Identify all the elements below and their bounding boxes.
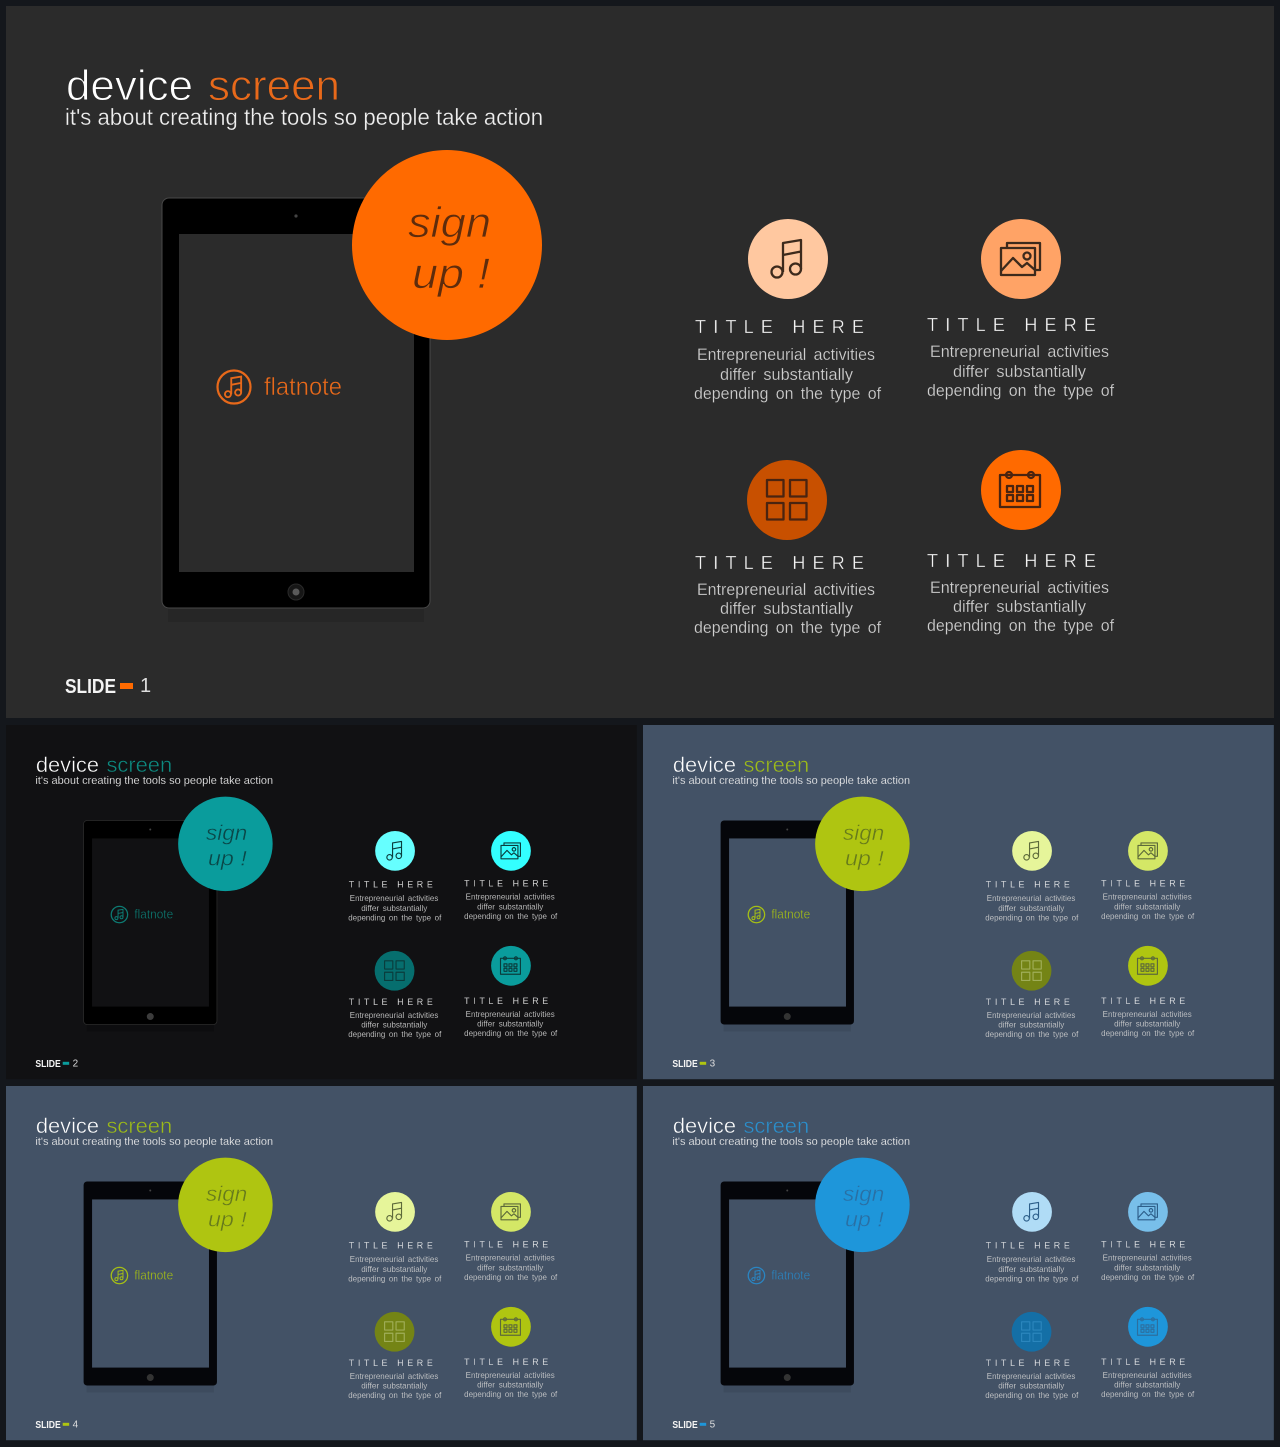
feature: pictures: TITLE HERE <box>1101 879 1185 889</box>
tablet device <box>721 821 854 1031</box>
flatnote logo <box>218 370 342 404</box>
sign up badge <box>178 797 273 891</box>
tablet device <box>84 821 217 1031</box>
title: screen <box>106 1114 172 1138</box>
slide number <box>672 1419 716 1431</box>
feature: music: Entrepreneurial activities <box>350 894 438 903</box>
feature: calendar: TITLE HERE <box>1101 1357 1185 1367</box>
title: device <box>673 753 736 777</box>
title <box>36 1114 172 1138</box>
feature: grid: Entrepreneurial activities <box>987 1011 1075 1020</box>
feature: music <box>694 219 881 403</box>
sign up badge: up ! <box>845 846 884 870</box>
feature: pictures: differ substantially <box>1114 1264 1181 1273</box>
sign up badge: sign <box>408 199 491 247</box>
title: screen <box>208 62 340 110</box>
slide number: SLIDE <box>672 1420 698 1431</box>
feature: calendar: depending on the type of <box>464 1390 558 1399</box>
feature: music: depending on the type of <box>348 914 442 923</box>
title: device <box>36 753 99 777</box>
sign up badge: up ! <box>208 846 247 870</box>
feature: pictures: TITLE HERE <box>927 315 1096 335</box>
subtitle: it's about creating the tools so people take action <box>65 104 543 130</box>
title: screen <box>106 753 172 777</box>
slide number: SLIDE <box>65 676 116 698</box>
feature: calendar: TITLE HERE <box>464 1357 548 1367</box>
slide number <box>35 1058 79 1070</box>
feature: music <box>985 831 1079 923</box>
feature: grid: differ substantially <box>998 1381 1065 1390</box>
subtitle: it's about creating the tools so people take action <box>672 1136 910 1148</box>
feature: calendar: depending on the type of <box>1101 1390 1195 1399</box>
sign up badge: up ! <box>845 1207 884 1231</box>
flatnote logo <box>111 1267 173 1284</box>
feature: grid: TITLE HERE <box>986 997 1070 1007</box>
flatnote logo: flatnote <box>771 1269 810 1283</box>
feature: calendar: Entrepreneurial activities <box>466 1010 555 1019</box>
slide number: 1 <box>140 675 151 697</box>
feature: music: differ substantially <box>361 904 428 913</box>
feature: music: Entrepreneurial activities <box>987 1255 1075 1264</box>
feature: pictures: depending on the type of <box>1101 1273 1195 1282</box>
flatnote logo <box>748 1267 810 1284</box>
feature: grid <box>985 1312 1079 1400</box>
feature: calendar <box>927 450 1114 635</box>
feature: music <box>348 831 442 923</box>
feature: calendar: TITLE HERE <box>1101 996 1185 1006</box>
subtitle: it's about creating the tools so people take action <box>672 775 910 787</box>
feature: pictures: differ substantially <box>477 903 544 912</box>
slide number <box>65 675 151 698</box>
flatnote logo: flatnote <box>134 1269 173 1283</box>
feature: pictures <box>1101 1192 1195 1282</box>
feature: calendar: differ substantially <box>1114 1380 1181 1389</box>
feature: grid: depending on the type of <box>694 619 881 637</box>
sign up badge <box>815 797 910 891</box>
feature: calendar <box>1101 1307 1195 1399</box>
feature: music: differ substantially <box>998 904 1065 913</box>
tablet device <box>162 198 430 622</box>
slide number: 2 <box>73 1058 79 1069</box>
title: screen <box>743 1114 809 1138</box>
slide number: 4 <box>73 1419 79 1430</box>
feature: pictures: depending on the type of <box>464 1273 558 1282</box>
feature: grid: differ substantially <box>998 1020 1065 1029</box>
feature: pictures: depending on the type of <box>927 382 1114 400</box>
panel: slide 2 teal <box>6 725 637 1079</box>
tablet device <box>84 1182 217 1392</box>
slide number: SLIDE <box>35 1059 61 1070</box>
sign up badge: sign <box>843 1182 884 1206</box>
panel: slide 3 lime <box>643 725 1274 1079</box>
title <box>673 753 809 777</box>
feature: grid: TITLE HERE <box>986 1358 1070 1368</box>
feature: pictures: Entrepreneurial activities <box>1103 1254 1192 1263</box>
panel: slide 1 orange <box>6 6 1274 718</box>
sign up badge: up ! <box>208 1207 247 1231</box>
feature: grid: Entrepreneurial activities <box>350 1372 438 1381</box>
feature: pictures: differ substantially <box>477 1264 544 1273</box>
feature: calendar: TITLE HERE <box>927 551 1096 571</box>
feature: pictures: differ substantially <box>953 363 1087 381</box>
feature: grid: Entrepreneurial activities <box>697 581 875 599</box>
sign up badge: up ! <box>412 250 490 298</box>
subtitle: it's about creating the tools so people take action <box>35 775 273 787</box>
feature: calendar: Entrepreneurial activities <box>466 1371 555 1380</box>
feature: grid <box>694 460 881 637</box>
subtitle: it's about creating the tools so people take action <box>35 1136 273 1148</box>
slide number: SLIDE <box>35 1420 61 1431</box>
feature: music: differ substantially <box>720 366 854 384</box>
feature: calendar: differ substantially <box>477 1380 544 1389</box>
feature: music: differ substantially <box>998 1265 1065 1274</box>
feature: calendar: differ substantially <box>477 1019 544 1028</box>
feature: calendar: differ substantially <box>1114 1019 1181 1028</box>
feature: grid: TITLE HERE <box>349 1358 433 1368</box>
feature: calendar: depending on the type of <box>464 1029 558 1038</box>
feature: grid: depending on the type of <box>985 1391 1079 1400</box>
feature: grid: Entrepreneurial activities <box>350 1011 438 1020</box>
feature: grid <box>348 1312 442 1400</box>
sign up badge <box>352 150 542 340</box>
feature: music: depending on the type of <box>348 1275 442 1284</box>
feature: pictures <box>464 831 558 921</box>
flatnote logo <box>111 906 173 923</box>
feature: pictures: depending on the type of <box>464 912 558 921</box>
feature: grid: TITLE HERE <box>695 553 864 573</box>
flatnote logo: flatnote <box>134 908 173 922</box>
feature: pictures: Entrepreneurial activities <box>466 893 555 902</box>
panel: slide 4 lime <box>6 1086 637 1440</box>
slide number: 5 <box>710 1419 716 1430</box>
sign up badge <box>815 1158 910 1252</box>
feature: grid: depending on the type of <box>348 1391 442 1400</box>
feature: pictures <box>1101 831 1195 921</box>
feature: grid: differ substantially <box>361 1381 428 1390</box>
feature: calendar: Entrepreneurial activities <box>1103 1010 1192 1019</box>
feature: grid: Entrepreneurial activities <box>987 1372 1075 1381</box>
feature: music: depending on the type of <box>985 1275 1079 1284</box>
feature: pictures <box>464 1192 558 1282</box>
feature: grid: depending on the type of <box>985 1030 1079 1039</box>
feature: calendar <box>1101 946 1195 1038</box>
feature: pictures: Entrepreneurial activities <box>466 1254 555 1263</box>
slide number <box>35 1419 79 1431</box>
feature: music: TITLE HERE <box>986 880 1070 890</box>
feature: music: Entrepreneurial activities <box>987 894 1075 903</box>
feature: calendar: depending on the type of <box>927 617 1114 635</box>
flatnote logo: flatnote <box>264 373 342 401</box>
feature: grid <box>985 951 1079 1039</box>
feature: pictures: depending on the type of <box>1101 912 1195 921</box>
feature: pictures: TITLE HERE <box>464 879 548 889</box>
feature: music: TITLE HERE <box>695 317 864 337</box>
feature: pictures <box>927 219 1114 400</box>
feature: grid: differ substantially <box>361 1020 428 1029</box>
feature: calendar: Entrepreneurial activities <box>930 579 1109 597</box>
feature: pictures: TITLE HERE <box>464 1240 548 1250</box>
feature: music: differ substantially <box>361 1265 428 1274</box>
feature: music: TITLE HERE <box>349 1241 433 1251</box>
feature: pictures: differ substantially <box>1114 903 1181 912</box>
title: device <box>36 1114 99 1138</box>
title <box>673 1114 809 1138</box>
feature: grid: depending on the type of <box>348 1030 442 1039</box>
tablet device <box>721 1182 854 1392</box>
feature: music <box>985 1192 1079 1284</box>
feature: calendar: depending on the type of <box>1101 1029 1195 1038</box>
slide number: 3 <box>710 1058 716 1069</box>
title: screen <box>743 753 809 777</box>
title <box>66 62 340 110</box>
feature: music: TITLE HERE <box>986 1241 1070 1251</box>
feature: music: TITLE HERE <box>349 880 433 890</box>
panel: slide 5 blue <box>643 1086 1274 1440</box>
feature: calendar: TITLE HERE <box>464 996 548 1006</box>
title: device <box>66 62 193 110</box>
feature: music: Entrepreneurial activities <box>697 346 875 364</box>
flatnote logo <box>748 906 810 923</box>
sign up badge: sign <box>206 821 247 845</box>
feature: music: depending on the type of <box>694 385 881 403</box>
feature: calendar: differ substantially <box>953 598 1087 616</box>
feature: pictures: Entrepreneurial activities <box>1103 893 1192 902</box>
sign up badge: sign <box>206 1182 247 1206</box>
feature: calendar <box>464 1307 558 1399</box>
feature: grid <box>348 951 442 1039</box>
feature: music <box>348 1192 442 1284</box>
feature: music: Entrepreneurial activities <box>350 1255 438 1264</box>
feature: calendar <box>464 946 558 1038</box>
feature: grid: TITLE HERE <box>349 997 433 1007</box>
sign up badge: sign <box>843 821 884 845</box>
title <box>36 753 172 777</box>
title: device <box>673 1114 736 1138</box>
slide number <box>672 1058 716 1070</box>
slide number: SLIDE <box>672 1059 698 1070</box>
feature: music: depending on the type of <box>985 914 1079 923</box>
flatnote logo: flatnote <box>771 908 810 922</box>
feature: calendar: Entrepreneurial activities <box>1103 1371 1192 1380</box>
sign up badge <box>178 1158 273 1252</box>
feature: grid: differ substantially <box>720 600 854 618</box>
feature: pictures: TITLE HERE <box>1101 1240 1185 1250</box>
feature: pictures: Entrepreneurial activities <box>930 343 1109 361</box>
